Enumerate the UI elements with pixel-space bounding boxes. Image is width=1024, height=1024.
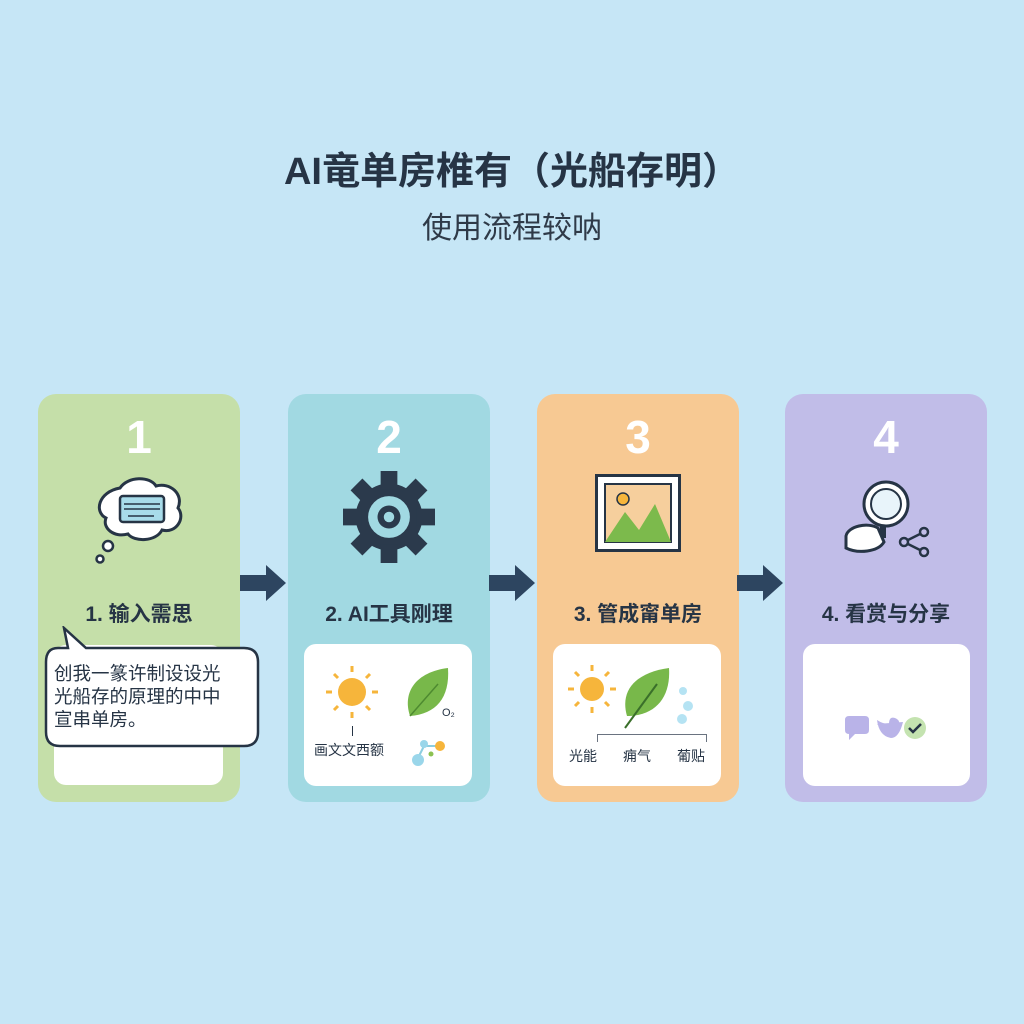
icon: gear bbox=[343, 471, 435, 563]
subtitle: 使用流程较呐 bbox=[422, 212, 602, 245]
icon: molecule bbox=[412, 740, 445, 766]
icon: leaf bbox=[624, 668, 670, 729]
white box 3: 葡贴 bbox=[677, 748, 705, 764]
panel: step 2 bbox=[288, 394, 490, 802]
white box 2 bbox=[304, 644, 472, 786]
arrow 2 bbox=[489, 565, 535, 601]
icons: social bbox=[845, 716, 926, 740]
icon: sun bbox=[326, 666, 378, 718]
step 4 heading: 4. 看赏与分享 bbox=[822, 603, 950, 626]
white box 3 bbox=[553, 644, 721, 786]
step 4 number: 4 bbox=[873, 411, 899, 463]
step 3 heading: 3. 管成甯单房 bbox=[574, 603, 702, 626]
title: AI竜单房椎有（光船存明） bbox=[284, 151, 740, 193]
panel: step 1 bbox=[38, 394, 240, 802]
icon: leaf O2: O₂ bbox=[442, 707, 455, 719]
white box 3: 痈气 bbox=[623, 748, 651, 764]
arrow 3 bbox=[737, 565, 783, 601]
step 1 heading: 1. 输入需思 bbox=[85, 603, 193, 626]
arrow 1 bbox=[240, 565, 286, 601]
callout: prompt bubble bbox=[44, 626, 260, 748]
step 2 heading: 2. AI工具刚理 bbox=[325, 603, 453, 626]
icon: leaf O2 bbox=[408, 668, 455, 719]
panel: step 4 bbox=[785, 394, 987, 802]
step 3 number: 3 bbox=[625, 411, 651, 463]
icon: bubbles bbox=[677, 687, 693, 724]
icon: sun bbox=[568, 665, 616, 713]
icon: magnifier share bbox=[844, 480, 930, 558]
step 2 number: 2 bbox=[376, 411, 402, 463]
label: 画文文西额 bbox=[314, 742, 384, 758]
callout: prompt bubble: 创我一篆许制设设光 bbox=[54, 663, 221, 684]
white box 4 bbox=[803, 644, 970, 786]
step 1 number: 1 bbox=[126, 411, 152, 463]
callout: prompt bubble: 宣串单房。 bbox=[54, 709, 147, 730]
panel: step 3 bbox=[537, 394, 739, 802]
white box 1 bbox=[54, 645, 223, 785]
callout: prompt bubble: 光船存的原理的中中 bbox=[54, 686, 221, 707]
labels: 光能 bbox=[569, 748, 597, 764]
icon: thought bubble keyboard bbox=[95, 477, 182, 564]
icon: picture bbox=[595, 474, 681, 552]
